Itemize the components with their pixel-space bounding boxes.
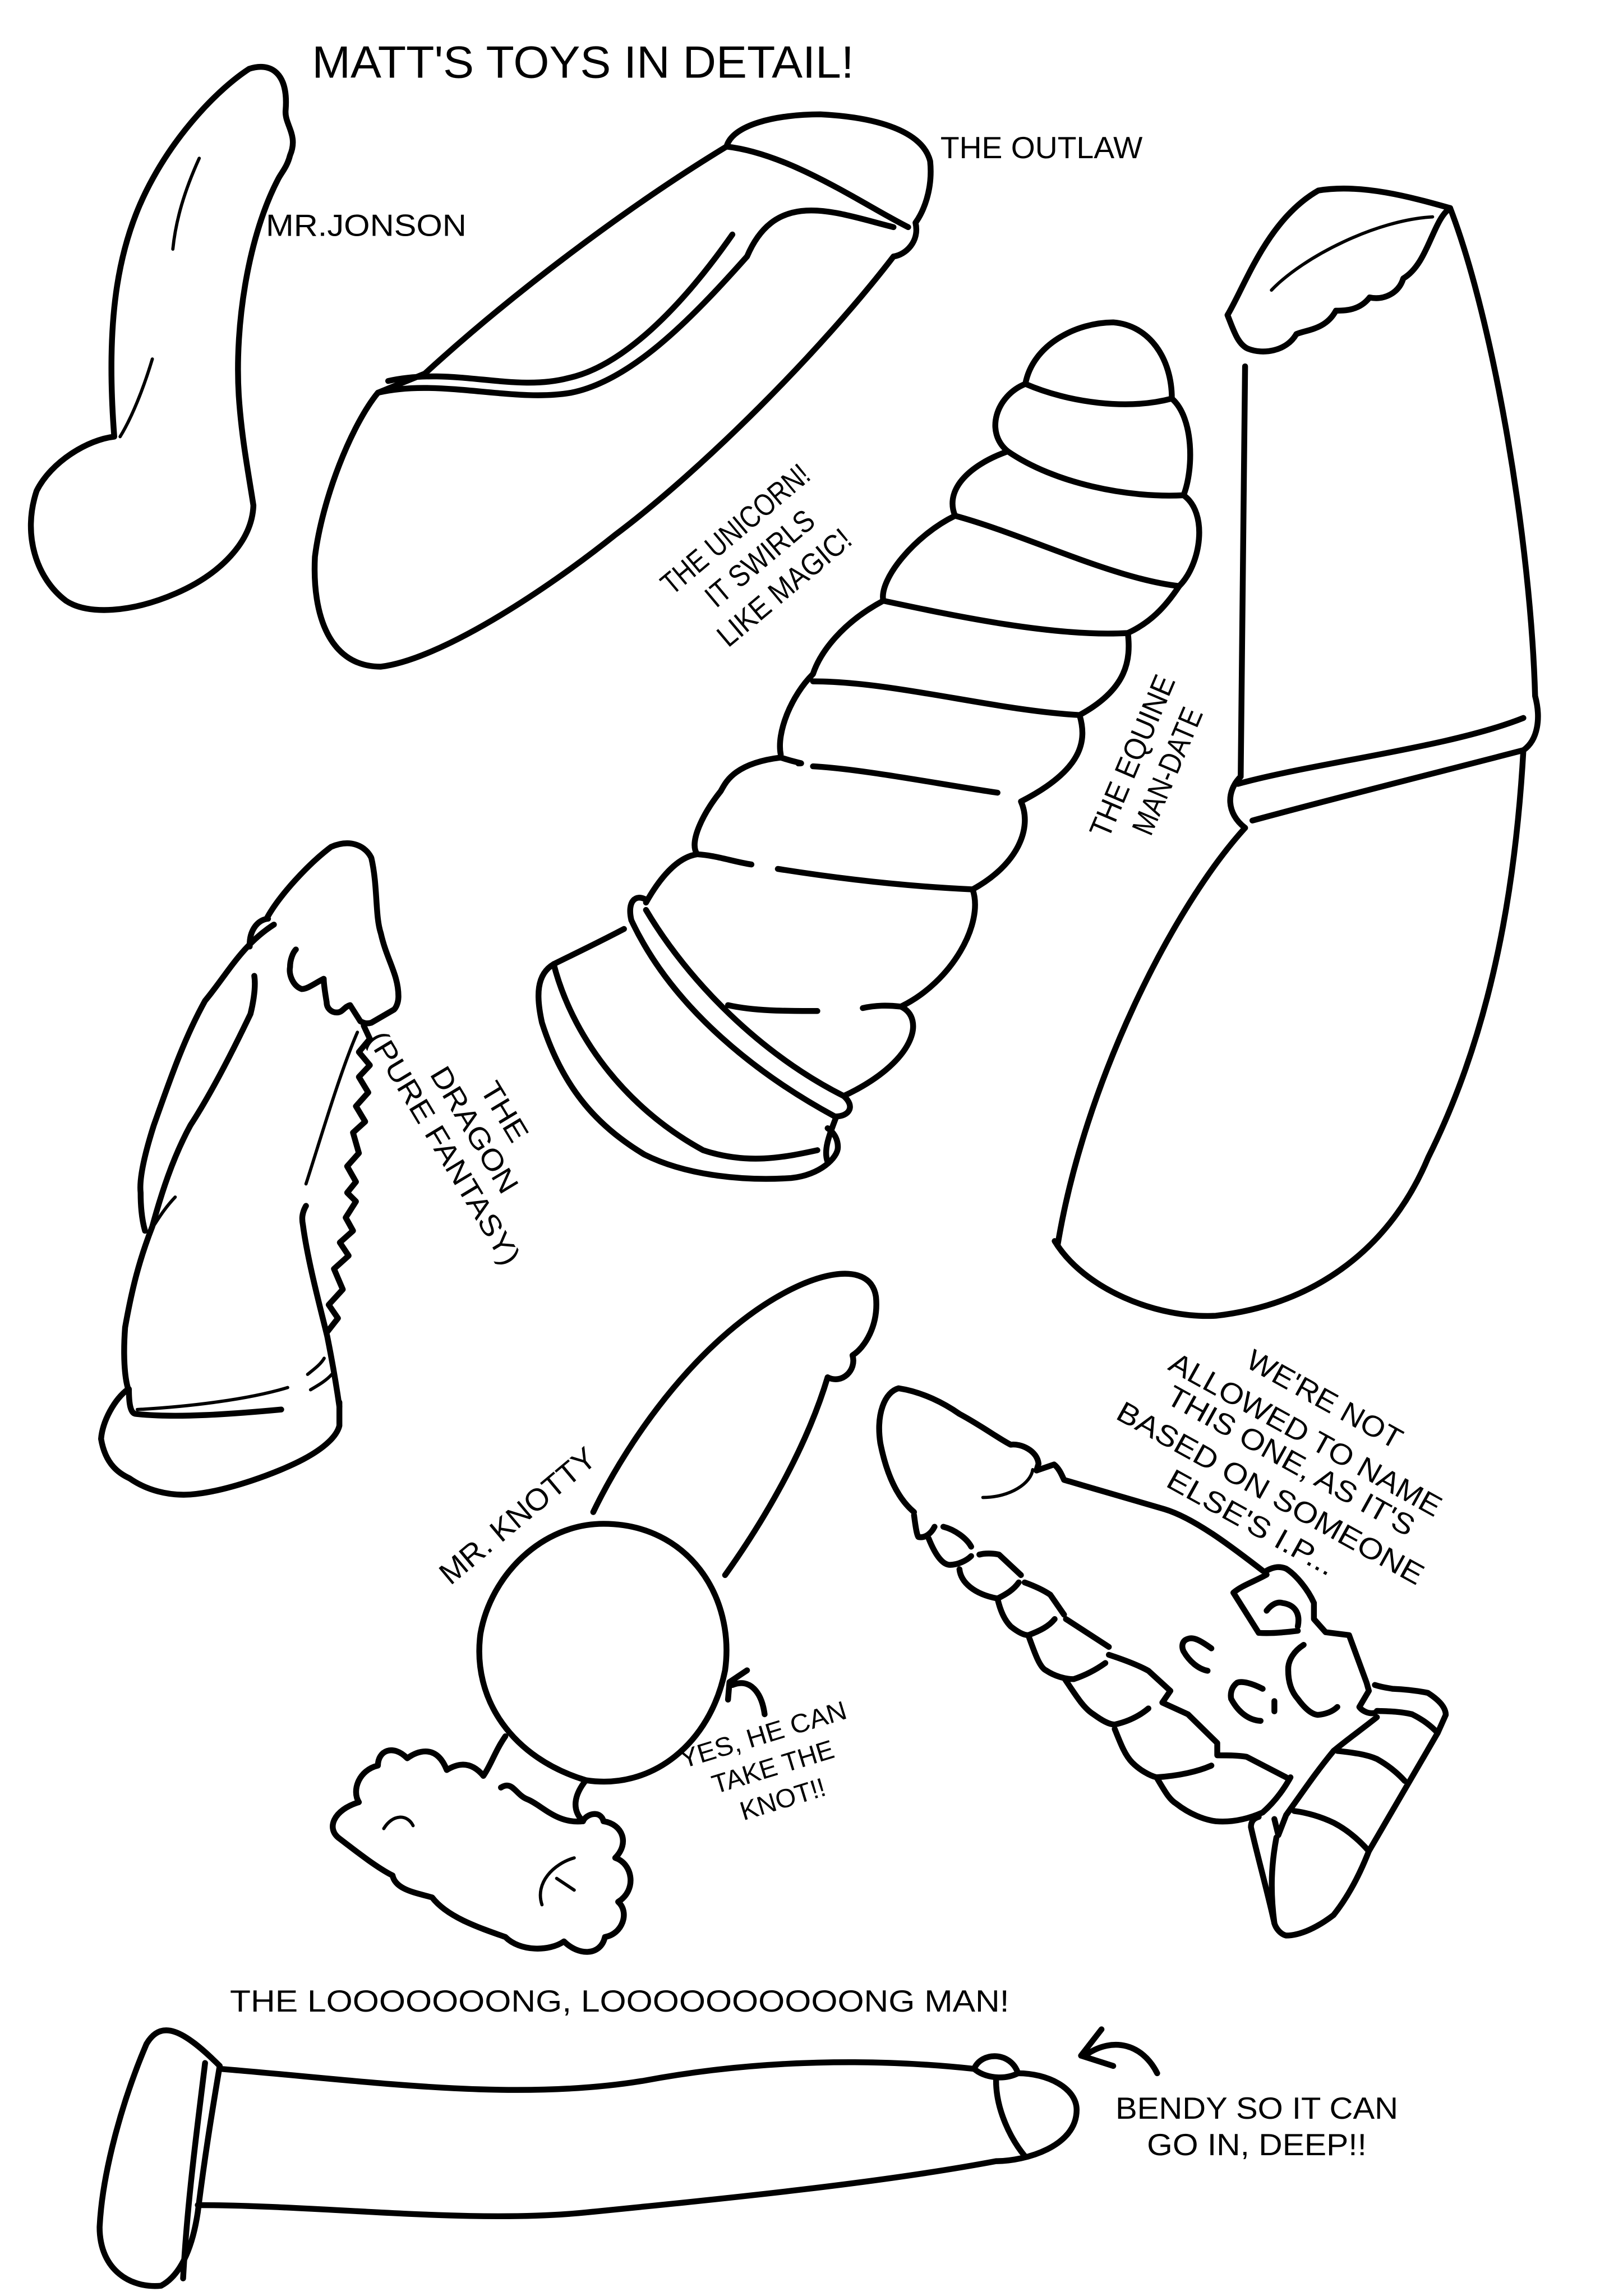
note: bendy: BENDY SO IT CAN [1115, 2091, 1398, 2125]
note: takes the knot [676, 1695, 870, 1838]
toy: unnamed horned toy [879, 1388, 1446, 1935]
toy: The Long Man [100, 2030, 1077, 2286]
label: unnamed horned toy: THIS ONE, AS IT'S [1161, 1379, 1421, 1543]
label: The Unicorn: IT SWIRLS [698, 503, 822, 614]
toy: The Unicorn [538, 323, 1199, 1179]
note: takes the knot: TAKE THE [708, 1734, 837, 1800]
toy: Mr. Jonson [31, 67, 293, 610]
note: takes the knot: KNOT!! [736, 1772, 829, 1826]
label: unnamed horned toy: ALLOWED TO NAME [1164, 1346, 1447, 1524]
label: unnamed horned toy: BASED ON SOMEONE [1111, 1396, 1430, 1591]
note: bendy: GO IN, DEEP!! [1147, 2127, 1367, 2162]
toy: The Equine Man-Date [1055, 188, 1538, 1316]
label: Mr. Knotty: MR. KNOTTY [432, 1440, 603, 1591]
label: The Unicorn: THE UNICORN! [654, 457, 817, 601]
note: takes the knot: YES, HE CAN [676, 1695, 850, 1774]
label: unnamed horned toy: WE'RE NOT [1241, 1343, 1408, 1456]
arrow: knot note [728, 1671, 764, 1714]
arrow: long man note [1081, 2030, 1157, 2073]
toy: The Outlaw [315, 114, 930, 666]
label: unnamed horned toy: ELSE'S I.P... [1161, 1463, 1341, 1582]
label: The Long Man: THE LOOOOOOONG, LOOOOOOOOOONG MAN! [230, 1984, 1009, 2018]
label: The Dragon [361, 990, 587, 1271]
toy: The Dragon [101, 843, 398, 1495]
label: The Unicorn [654, 457, 865, 660]
label: The Equine Man-Date [1082, 670, 1217, 857]
label: The Equine Man-Date: MAN-DATE [1125, 702, 1210, 840]
note: bendy [1115, 2091, 1398, 2162]
title: MATT'S TOYS IN DETAIL! [312, 37, 854, 88]
label: The Unicorn: LIKE MAGIC! [710, 521, 858, 654]
label: The Dragon: DRAGON [423, 1061, 524, 1199]
label: The Dragon: (PURE FANTASY) [361, 1025, 527, 1271]
toy: Mr. Knotty [333, 1274, 877, 1952]
label: The Dragon: THE [473, 1076, 534, 1148]
label: Mr. Jonson: MR.JONSON [266, 208, 467, 243]
label: unnamed horned toy [1111, 1343, 1447, 1591]
label: The Equine Man-Date: THE EQUINE [1082, 670, 1182, 843]
label: The Outlaw: THE OUTLAW [940, 130, 1143, 165]
